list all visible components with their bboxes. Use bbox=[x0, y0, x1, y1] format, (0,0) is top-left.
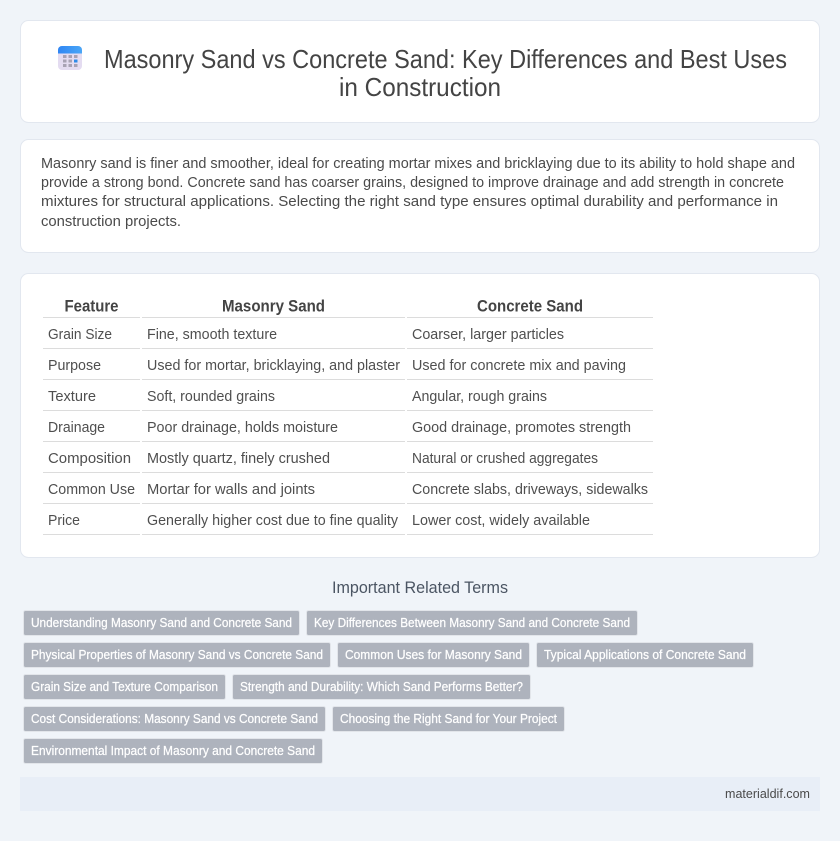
tag list: related terms: Strength and Durability: Which Sand Performs Better? bbox=[240, 679, 523, 694]
table header: Masonry Sand bbox=[222, 298, 325, 316]
footer: materialdif.com bbox=[725, 786, 810, 801]
panel: introduction bbox=[20, 140, 820, 252]
text block: introduction: construction projects. bbox=[41, 213, 181, 230]
panel: comparison table bbox=[20, 274, 820, 558]
footer bbox=[20, 777, 820, 811]
tag list: related terms: Understanding Masonry Sand and Concrete Sand bbox=[31, 615, 292, 630]
tag list: related terms: Typical Applications of Concrete Sand bbox=[544, 647, 746, 662]
panel: title card bbox=[20, 20, 820, 122]
row: price bbox=[48, 512, 590, 529]
tag list: related terms bbox=[24, 610, 754, 764]
row: purpose bbox=[48, 357, 626, 374]
row: common use: Mortar for walls and joints bbox=[147, 481, 315, 498]
tag list: related terms: Key Differences Between Masonry Sand and Concrete Sand bbox=[314, 615, 630, 630]
row: price: Lower cost, widely available bbox=[412, 512, 590, 529]
tag list: related terms: Physical Properties of Masonry Sand vs Concrete Sand bbox=[31, 647, 323, 662]
row: drainage: Good drainage, promotes strength bbox=[412, 419, 631, 436]
row: drainage: Poor drainage, holds moisture bbox=[147, 419, 338, 436]
row: grain size: Grain Size bbox=[48, 326, 112, 343]
tag list: related terms: Choosing the Right Sand for Your Project bbox=[340, 711, 557, 726]
row: drainage bbox=[48, 419, 631, 436]
title: Masonry Sand vs Concrete Sand: Key Differences and Best Uses bbox=[104, 44, 787, 74]
row: composition bbox=[48, 450, 598, 467]
row: drainage: Drainage bbox=[48, 419, 105, 436]
row: grain size: Coarser, larger particles bbox=[412, 326, 564, 343]
row: grain size bbox=[48, 326, 564, 343]
row: texture: Angular, rough grains bbox=[412, 388, 547, 405]
title: in Construction bbox=[339, 72, 501, 102]
row: texture bbox=[48, 388, 547, 405]
text block: introduction: Masonry sand is finer and smoother, ideal for creating mortar mixes and bricklaying due to its ability to hold shape and bbox=[41, 155, 795, 172]
text block: introduction: mixtures for structural applications. Selecting the right sand type ensures optimal durability and performance in bbox=[41, 193, 778, 210]
table header: Feature bbox=[64, 298, 118, 316]
row: price: Generally higher cost due to fine quality bbox=[147, 512, 398, 529]
title bbox=[104, 44, 787, 102]
row: composition: Composition bbox=[48, 450, 131, 467]
row: composition: Mostly quartz, finely crushed bbox=[147, 450, 330, 467]
text block: introduction: provide a strong bond. Concrete sand has coarser grains, designed to improve drainage and add strength in concrete bbox=[41, 174, 784, 191]
row: common use bbox=[48, 481, 648, 498]
row: texture: Soft, rounded grains bbox=[147, 388, 275, 405]
table header: Concrete Sand bbox=[477, 298, 583, 316]
tag list: related terms: Common Uses for Masonry Sand bbox=[345, 647, 522, 662]
tag list: related terms: Environmental Impact of Masonry and Concrete Sand bbox=[31, 743, 315, 758]
row: common use: Concrete slabs, driveways, sidewalks bbox=[412, 481, 648, 498]
tag list: related terms: Grain Size and Texture Comparison bbox=[31, 679, 218, 694]
heading: related terms: Important Related Terms bbox=[332, 578, 508, 597]
text block: introduction bbox=[41, 155, 795, 230]
row: purpose: Purpose bbox=[48, 357, 101, 374]
row: price: Price bbox=[48, 512, 80, 529]
row: common use: Common Use bbox=[48, 481, 135, 498]
row: purpose: Used for concrete mix and paving bbox=[412, 357, 626, 374]
row: grain size: Fine, smooth texture bbox=[147, 326, 277, 343]
row: purpose: Used for mortar, bricklaying, and plaster bbox=[147, 357, 400, 374]
table header bbox=[64, 298, 583, 316]
tag list: related terms: Cost Considerations: Masonry Sand vs Concrete Sand bbox=[31, 711, 318, 726]
icon: calendar grid bbox=[58, 46, 82, 70]
row: texture: Texture bbox=[48, 388, 96, 405]
row: composition: Natural or crushed aggregates bbox=[412, 450, 598, 467]
